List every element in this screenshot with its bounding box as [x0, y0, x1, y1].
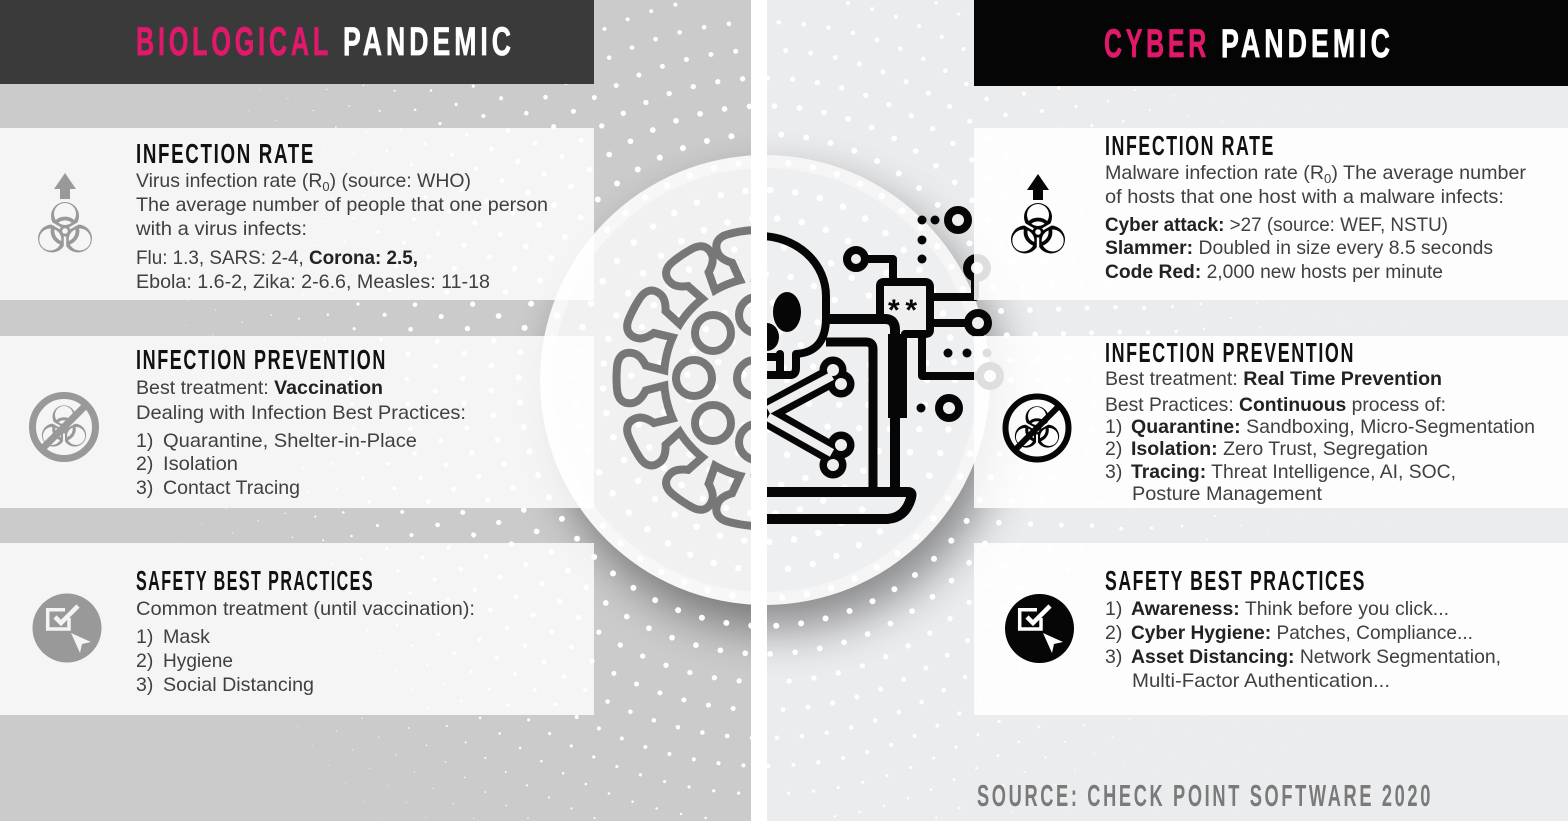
skull eye [773, 292, 801, 332]
text block: 3) [1105, 646, 1122, 668]
text block: 3) [136, 477, 153, 499]
text block [1105, 162, 1526, 283]
text block: 3) [136, 674, 153, 696]
heading: INFECTION RATE [1105, 130, 1275, 161]
text block: Cyber Hygiene: Patches, Compliance... [1131, 622, 1473, 644]
text block: 2) [1105, 622, 1122, 644]
text block [136, 598, 475, 696]
central circle [540, 155, 990, 605]
icon: biohazard with up arrow [25, 173, 105, 271]
icon: prohibited biohazard [31, 396, 97, 462]
panel: cyber infection rate [974, 128, 1568, 300]
text block: Isolation [163, 453, 238, 475]
text block: Mask [163, 626, 210, 648]
circuit dots [916, 216, 992, 412]
text block: Social Distancing [163, 674, 314, 696]
central circle shadow [553, 179, 1003, 629]
heading: SAFETY BEST PRACTICES [136, 565, 374, 596]
icon: prohibited biohazard [1004, 396, 1070, 463]
crossbones [758, 356, 854, 478]
text block: Ebola: 1.6-2, Zika: 2-6.6, Measles: 11-18 [136, 271, 490, 293]
header: cyber pandemic [974, 0, 1568, 86]
left background [0, 0, 751, 821]
text block: Asset Distancing: Network Segmentation, [1131, 646, 1501, 668]
text block: ) (source: WHO) [330, 170, 471, 192]
icon: skull on laptop with circuit [755, 210, 1000, 519]
text block: 0 [322, 179, 330, 194]
text block: 1) [1105, 416, 1122, 438]
icon: biohazard with up arrow [998, 174, 1078, 272]
laptop thick edge [888, 334, 907, 418]
text block [1105, 368, 1535, 505]
text block: 0 [1324, 171, 1331, 186]
circuit nodes [847, 210, 1000, 418]
text block: Malware infection rate (R [1105, 162, 1322, 184]
header: biological pandemic: BIOLOGICAL [136, 20, 332, 64]
header: cyber pandemic: CYBER [1104, 22, 1210, 66]
panel: cyber safety best practices [974, 543, 1568, 715]
text block: Cyber attack: >27 (source: WEF, NSTU) [1105, 214, 1448, 236]
text block: Common treatment (until vaccination): [136, 598, 475, 620]
text block: Contact Tracing [163, 477, 300, 499]
panel: biological infection rate [0, 128, 594, 300]
header: biological pandemic [0, 0, 594, 84]
text block: Hygiene [163, 650, 233, 672]
text block: with a virus infects: [135, 218, 307, 240]
text block: Isolation: Zero Trust, Segregation [1131, 438, 1428, 460]
heading: SAFETY BEST PRACTICES [1105, 565, 1366, 596]
text block: Quarantine, Shelter-in-Place [163, 430, 417, 452]
text block [136, 377, 466, 499]
text block: Slammer: Doubled in size every 8.5 seconds [1105, 237, 1493, 259]
text block: 1) [1105, 598, 1122, 620]
text block: 2) [1105, 438, 1122, 460]
text block: ) The average number [1331, 162, 1526, 184]
heading: INFECTION PREVENTION [136, 344, 387, 375]
centre divider [751, 0, 767, 821]
text block: Best Practices: Continuous process of: [1105, 394, 1446, 416]
icon: checkbox and cursor [1005, 594, 1074, 663]
panel: biological infection prevention [0, 336, 594, 508]
text block: Multi-Factor Authentication... [1132, 670, 1390, 692]
text block: 2) [136, 650, 153, 672]
text block: 3) [1105, 461, 1122, 483]
heading: INFECTION PREVENTION [1105, 337, 1355, 368]
skull nose [767, 323, 779, 351]
icon: checkbox and cursor [32, 594, 102, 662]
text block: Code Red: 2,000 new hosts per minute [1105, 261, 1443, 283]
text block: The average number of people that one person [136, 194, 548, 216]
header: cyber pandemic: PANDEMIC [1221, 22, 1394, 66]
text block: 1) [136, 626, 153, 648]
panel: biological safety best practices [0, 543, 594, 715]
text block [135, 170, 548, 293]
text block: Posture Management [1132, 483, 1323, 505]
text block: Flu: 1.3, SARS: 2-4, Corona: 2.5, [136, 247, 418, 269]
chip stars: ** [888, 294, 917, 327]
text block: Best treatment: Vaccination [136, 377, 383, 399]
text block: of hosts that one host with a malware infects: [1105, 186, 1504, 208]
text block: 1) [136, 430, 153, 452]
panel: cyber infection prevention [974, 336, 1568, 508]
text block: Best treatment: Real Time Prevention [1105, 368, 1442, 390]
text block: Dealing with Infection Best Practices: [136, 402, 466, 424]
text block: Virus infection rate (R [136, 170, 323, 192]
text block: Awareness: Think before you click... [1131, 598, 1449, 620]
right background [767, 0, 1568, 821]
text block: Quarantine: Sandboxing, Micro-Segmentation [1131, 416, 1535, 438]
icon: virus half [612, 226, 751, 530]
text block: Tracing: Threat Intelligence, AI, SOC, [1131, 461, 1456, 483]
header: biological pandemic: PANDEMIC [343, 20, 515, 64]
heading: INFECTION RATE [136, 138, 315, 169]
text block: 2) [136, 453, 153, 475]
text block [1105, 598, 1501, 692]
